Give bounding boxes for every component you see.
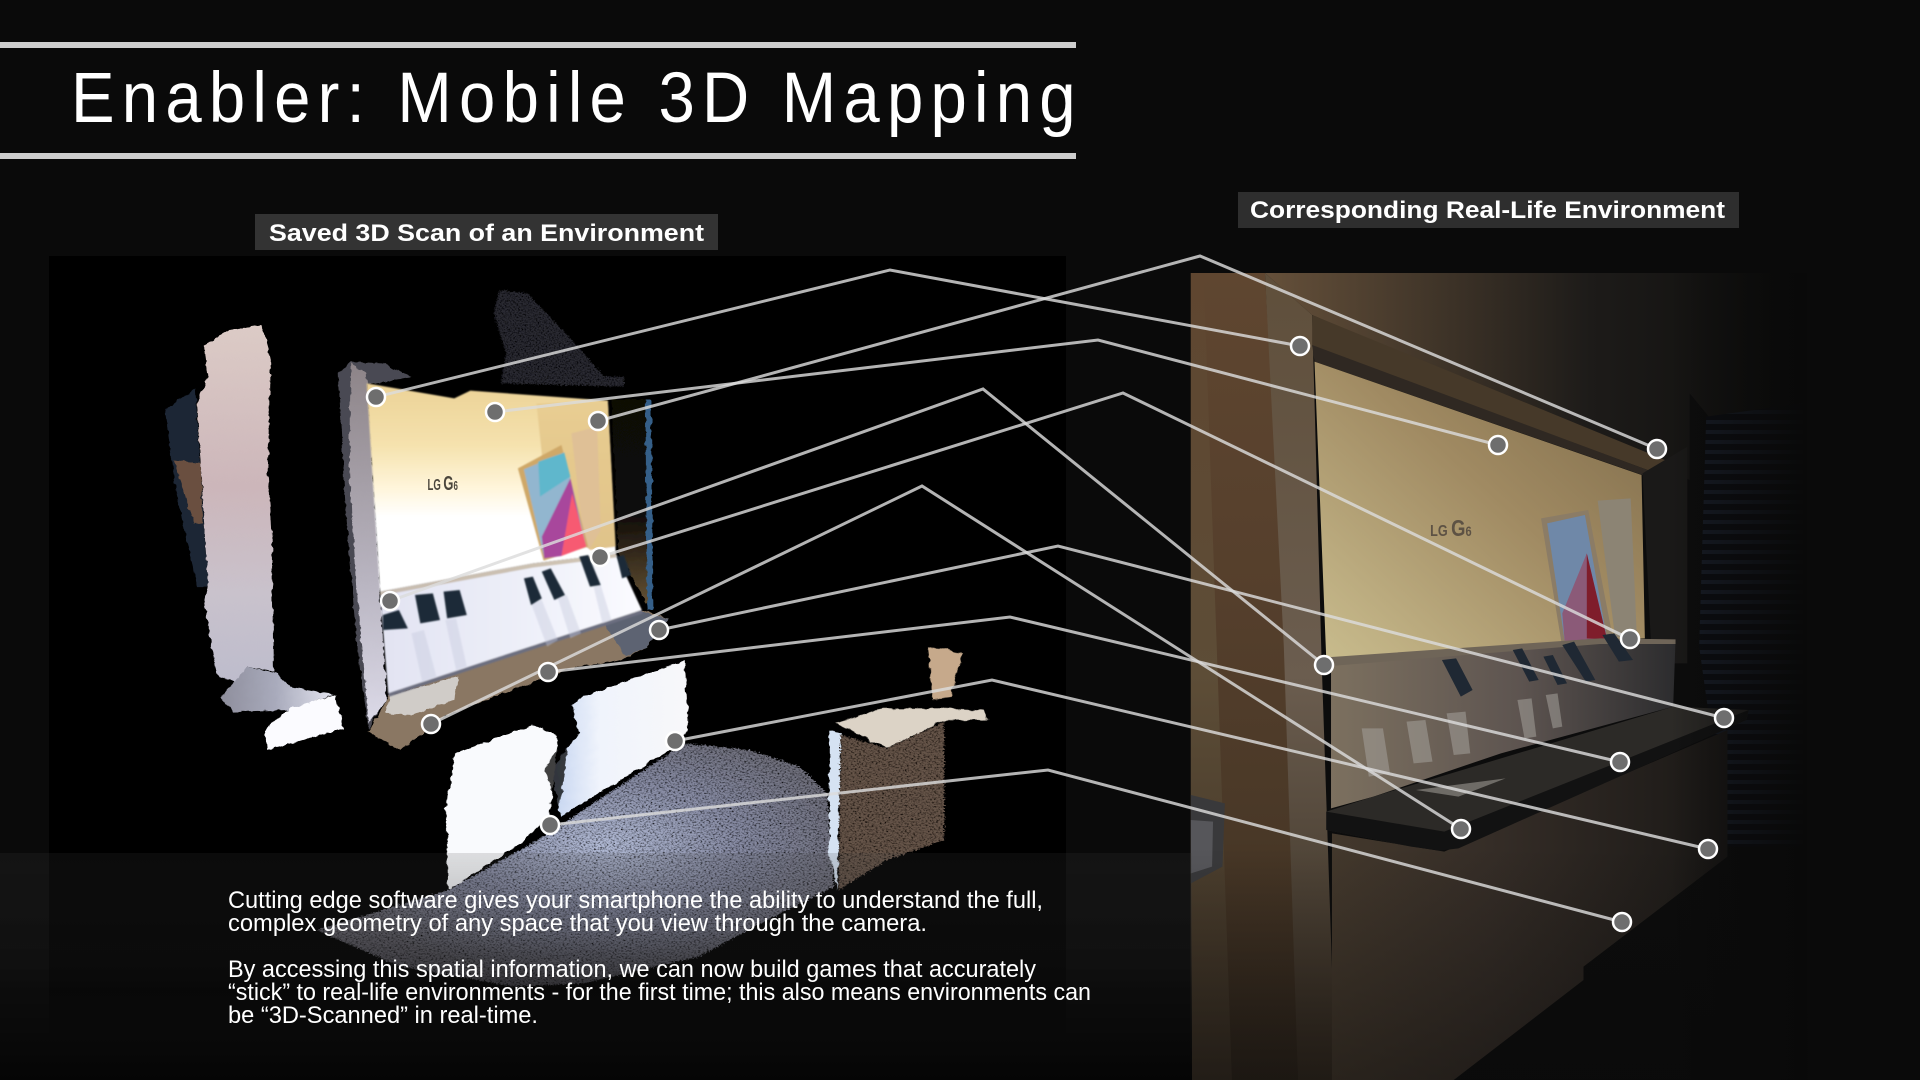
photo: lighter column edge (1191, 273, 1232, 1080)
floor (317, 743, 834, 987)
body text: be “3D-Scanned” in real-time. (228, 1002, 538, 1029)
title rules (0, 42, 1076, 159)
photo: shadow under soffit (1312, 345, 1652, 475)
photo: left column (1191, 273, 1298, 1080)
corner box face (838, 722, 944, 890)
photo: upper wall (1265, 273, 1789, 513)
body text: By accessing this spatial information, we can now build games that accurately (228, 956, 1036, 983)
photo: small side box (1191, 795, 1225, 883)
heading: real-life environment: Corresponding Real-Life Environment (1250, 197, 1725, 224)
scan: left wall fragment (165, 325, 344, 750)
scan: display wall with poster (338, 362, 669, 750)
title: Enabler: Mobile 3D Mapping (71, 59, 1076, 138)
photo: poster phones (1541, 498, 1637, 642)
photo: counter top (1326, 707, 1749, 850)
photo: counter lip (1326, 710, 1749, 851)
photo: cabinet (1332, 730, 1727, 1080)
markers on photo (1291, 337, 1733, 931)
photo: blinds (1699, 403, 1803, 847)
connector lines between scan and photo (376, 256, 1724, 922)
photo: bottom fade (1191, 847, 1814, 1080)
panel: real-life photo (1191, 273, 1814, 1080)
photo: paper signs (1362, 693, 1562, 797)
scan: floor and lower walls (317, 647, 988, 987)
heading: saved 3D scan (255, 214, 718, 250)
translucent text band (0, 853, 1192, 1080)
scan: dark speckled ceiling (494, 290, 624, 387)
body text: “stick” to real-life environments - for the first time; this also means environments can (228, 979, 1091, 1006)
photo: lower wall (1331, 638, 1676, 808)
body text: complex geometry of any space that you view through the camera. (228, 910, 927, 937)
photo: poster (1315, 362, 1645, 660)
photo: LG G6 logo: LG G6 (1430, 516, 1472, 542)
wall column shading (411, 585, 611, 682)
panel: saved 3D scan (49, 256, 1066, 1080)
body text: Cutting edge software gives your smartphone the ability to understand the full, (228, 887, 1043, 914)
markers on scan (367, 388, 684, 834)
heading: real-life environment (1238, 192, 1739, 228)
photo: right fade (1671, 273, 1808, 1080)
photo: soffit (1312, 315, 1673, 472)
LG G6 logo: LG G6 (427, 472, 458, 495)
photo: shelf strip (1326, 638, 1676, 666)
body text (228, 887, 1091, 1029)
photo: alcove side (1643, 447, 1687, 663)
white walls and corner box (446, 647, 988, 890)
photo: wall phones (1442, 633, 1633, 697)
photo: pillar (1265, 273, 1336, 1080)
poster phones (518, 427, 601, 561)
poster and lower wall (367, 383, 643, 697)
heading: saved 3D scan: Saved 3D Scan of an Environment (269, 220, 704, 247)
phones on wall (383, 555, 631, 630)
wall frame and alcove (338, 362, 669, 750)
